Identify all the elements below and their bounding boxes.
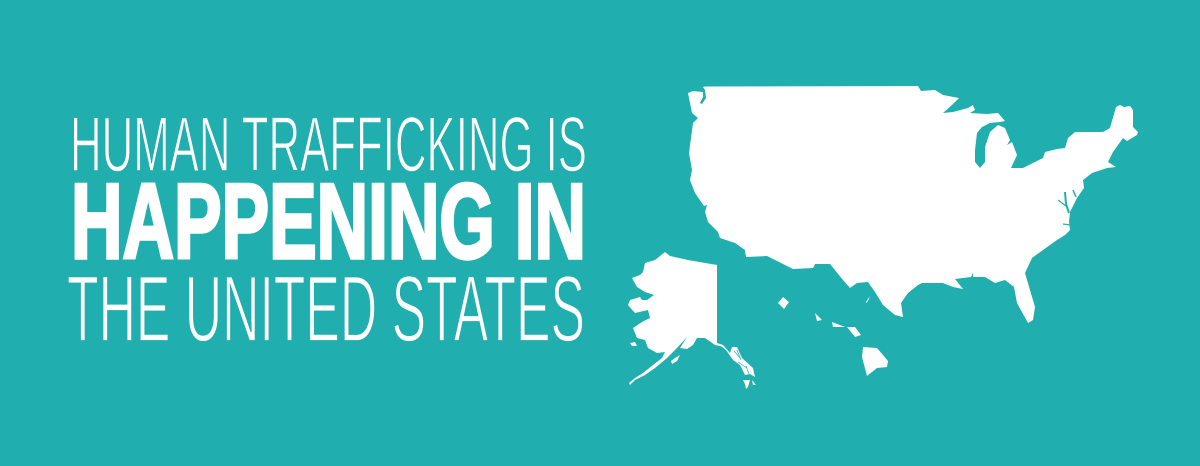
contiguous United States [688, 86, 1138, 323]
Alaska: southern islands [743, 380, 750, 389]
Alaska [628, 252, 724, 385]
title line 2: HAPPENING IN [71, 161, 586, 281]
map of the United States [628, 86, 1138, 389]
Hawaii: Molokai [832, 322, 845, 327]
title line 1: HUMAN TRAFFICKING IS [70, 100, 587, 188]
title line 3: THE UNITED STATES [67, 256, 585, 361]
Hawaii: Big Island [862, 347, 888, 376]
Hawaii: Maui [847, 327, 861, 337]
title [67, 100, 587, 361]
Alaska: panhandle [717, 343, 755, 377]
Alaska: small southern island [752, 380, 756, 385]
Hawaii: Oahu [815, 313, 822, 321]
small island speck [866, 296, 870, 303]
Alaska: Kodiak Island [671, 355, 680, 364]
Hawaii: Kauai [778, 297, 789, 309]
Puget Sound notch [692, 87, 706, 104]
Alaska: panhandle channels [734, 350, 749, 374]
Alaska: Nunivak Island [630, 342, 637, 346]
Chesapeake and Delaware bays [1058, 190, 1076, 225]
